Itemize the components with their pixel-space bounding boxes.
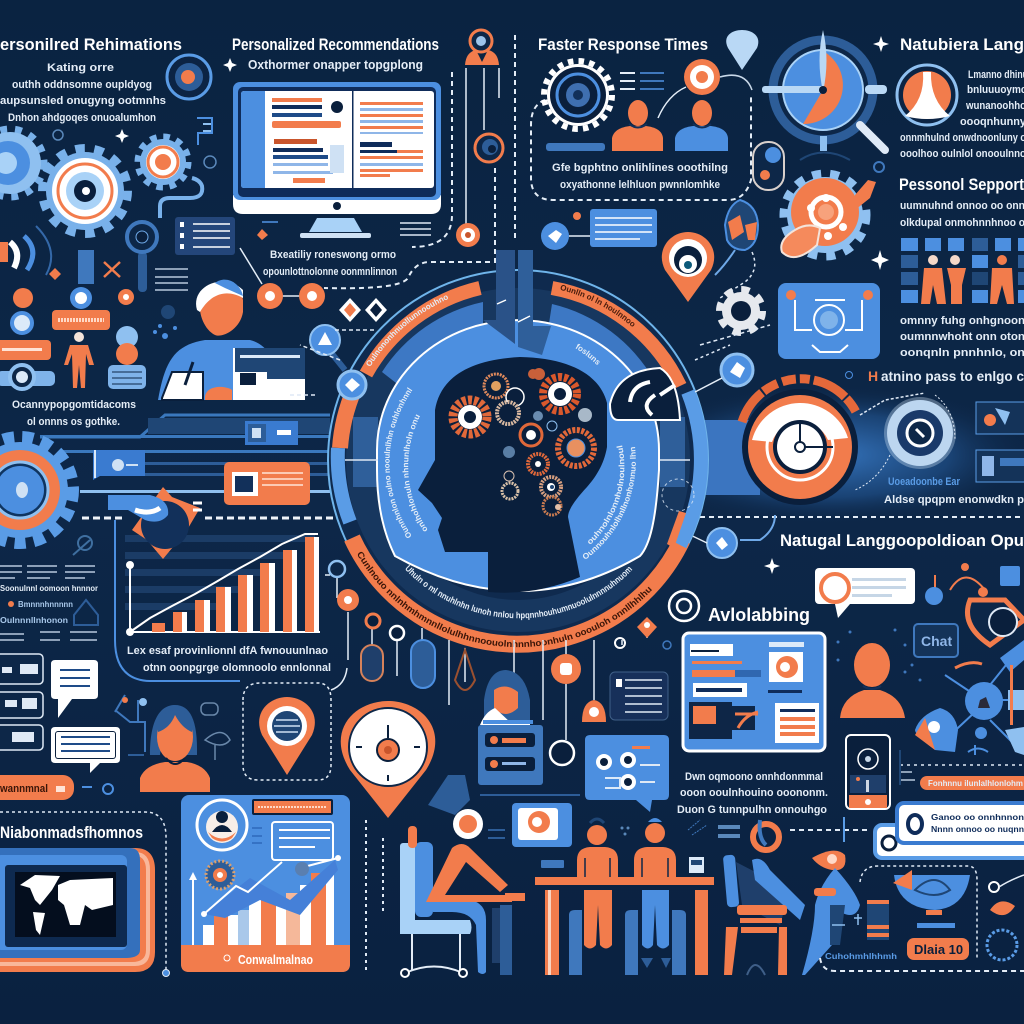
text block: faster response caption: Gfe bgphtno onlihlines ooothilng xyxy=(552,162,728,174)
pin: orange target xyxy=(662,232,714,302)
left table edge xyxy=(500,893,525,975)
hanging nodes right xyxy=(550,617,671,765)
text block: right middle: omnny fuhg onhgnoon xyxy=(900,315,1024,327)
orange cog xyxy=(206,861,234,889)
grid: support team squares xyxy=(901,238,1024,304)
nodes: ring left top xyxy=(310,325,366,399)
right arm connector xyxy=(660,459,690,461)
ghost device below xyxy=(428,775,470,815)
row: small nodes xyxy=(13,287,134,309)
progress bar xyxy=(546,143,605,151)
card: dark list xyxy=(610,672,668,720)
text block: left caption xyxy=(12,399,136,428)
heading: natural language options: Natugal Langgoopoldioan Opu xyxy=(780,531,1024,550)
lines beside monitor xyxy=(257,222,431,240)
icon: standing person xyxy=(64,332,94,388)
gear: partial left xyxy=(0,129,44,197)
small box content xyxy=(2,664,38,742)
gear: large xyxy=(43,149,127,233)
dashed divider xyxy=(700,516,1024,518)
button: orange: Dlaia 10 xyxy=(914,942,963,957)
disc text: right: ouhnolnlonnholnoulnoul xyxy=(588,446,624,544)
text block: right middle: oumnnwhoht onn oton xyxy=(900,331,1024,343)
text block: chart caption xyxy=(127,645,331,674)
small sparkle xyxy=(832,914,862,925)
connector curve xyxy=(658,87,686,118)
icon: sparkle xyxy=(871,250,889,270)
heading: faster response times: Faster Response Times xyxy=(538,35,708,54)
phone xyxy=(846,735,890,809)
dashed line bottom xyxy=(820,958,1024,971)
upper blue band xyxy=(382,302,654,395)
dashed connector xyxy=(324,168,495,288)
icon: orange cross xyxy=(104,262,120,277)
text block: gear caption: Aldse qpqpm enonwdkn p xyxy=(884,494,1024,506)
gear: orange support xyxy=(781,174,876,257)
text block: chart caption: otnn oonpgrge olomnoolo ennlonnal xyxy=(143,662,331,674)
text block: left intro: aupsunsled onugyng ootmnhs xyxy=(0,95,166,107)
disc text: right xyxy=(576,344,636,559)
card: image thumbnail bottom xyxy=(976,450,1024,482)
gear: left big orange xyxy=(0,438,72,542)
small network icon xyxy=(115,695,147,756)
text block: left caption: ol onnns os gothke. xyxy=(27,416,120,428)
node: orange ring upper xyxy=(475,134,503,162)
dashed vertical divider xyxy=(514,35,516,240)
text block: left intro: Dnhon ahdgoqes onuoalumhon xyxy=(8,112,156,124)
dashed panel: right bottom xyxy=(860,866,977,958)
node end dot xyxy=(162,970,170,976)
background glow xyxy=(630,385,1024,525)
panel: growth chart card xyxy=(181,795,350,972)
text block: gear caption: Uoeadoonbe Ear xyxy=(888,476,961,488)
card: blue with swirl xyxy=(512,803,572,847)
bars xyxy=(203,873,334,945)
dots halo xyxy=(836,628,922,682)
icon: T connector xyxy=(93,450,145,480)
icon: bowl trophy xyxy=(893,870,970,928)
icon: small leaf xyxy=(73,536,92,555)
heading: personalized recommendations: Personalized Recommendations xyxy=(232,35,439,54)
connector to ring xyxy=(331,668,347,690)
figure: orange person xyxy=(612,100,663,151)
text block: faster response caption: oxyathonne lelhluon pwnnlomhke xyxy=(560,179,720,191)
small boxes xyxy=(0,654,43,750)
panel: growth chart card: Conwalmalnao xyxy=(238,952,313,967)
text block: left small items: Oulnnnllnhonon xyxy=(0,616,68,625)
dashed connector xyxy=(720,252,755,298)
orange bar xyxy=(0,340,51,360)
nodes: orange pair xyxy=(240,248,325,309)
figure: woman orange xyxy=(140,705,210,792)
text block: left intro: Kating orre xyxy=(47,62,114,74)
icon: key xyxy=(0,365,55,389)
disc text: right: Ounnouhnlolhnllnonhonnuo lhn xyxy=(583,447,636,559)
orange marker on right xyxy=(667,511,686,548)
dashed link xyxy=(790,829,870,831)
text block: right middle: oonqnln pnnhnlo, on xyxy=(900,347,1024,359)
bubble: white with icon xyxy=(815,568,915,618)
server panel xyxy=(478,725,580,795)
icon: magnifier xyxy=(127,222,157,292)
chart: pie gauge xyxy=(762,30,887,160)
dashed vertical xyxy=(365,820,367,972)
icon: house xyxy=(74,600,98,625)
icon: wifi arcs xyxy=(0,226,51,275)
pill: orange label: wannmnal xyxy=(0,783,48,795)
dashed dividers left xyxy=(82,516,335,520)
icon: orange swirl xyxy=(753,820,779,850)
heading: orange accent line: H xyxy=(868,368,878,384)
connector: pipe xyxy=(160,178,202,218)
mid band xyxy=(362,304,674,616)
arc text: top left: Oulnononhnuollunnoouhno xyxy=(366,296,448,366)
panel: world map title frame xyxy=(0,812,166,970)
icon: bust with headset xyxy=(108,326,146,389)
orange arc: left xyxy=(340,390,354,448)
caption line: Cuhohmhlhhmh xyxy=(825,952,897,961)
icon: toggle pill xyxy=(753,142,784,190)
text block: dashboard caption: Dwn oqmoono onnhdonmmal xyxy=(685,771,823,783)
icon: small ring link xyxy=(82,784,113,794)
small lines xyxy=(620,73,664,89)
text block: left intro: outhh oddnsomne oupldyog xyxy=(12,79,152,91)
icon: round language badge xyxy=(897,65,957,125)
diamonds xyxy=(339,298,387,322)
stem accents xyxy=(497,300,530,322)
heading: natural language: Natubiera Lang xyxy=(900,35,1024,54)
bubbles: stacked right xyxy=(875,803,1024,858)
inner disc xyxy=(377,320,659,591)
text block: faster response caption xyxy=(552,162,728,191)
label: orange tag xyxy=(52,310,110,330)
blue arc: left xyxy=(338,448,350,522)
text block: left small items: Bmnnnhnnnnn xyxy=(18,600,73,609)
screen: world map xyxy=(0,848,155,972)
card: image thumbnail top xyxy=(976,402,1024,434)
orange arc: top left xyxy=(366,288,480,374)
network cluster xyxy=(915,640,1024,755)
gear: small orange xyxy=(138,137,188,187)
gear: white xyxy=(720,290,762,332)
panel border: chart curve xyxy=(115,520,240,681)
heading: availability: Avlolabbing xyxy=(708,605,810,625)
blue arc: right xyxy=(680,392,701,545)
icon: small document xyxy=(197,118,212,145)
bubbles: stacked right: Ganoo oo onnhnnon xyxy=(931,813,1024,822)
bubble: white medium xyxy=(51,727,120,773)
outer ring xyxy=(328,270,708,650)
text block: left intro xyxy=(0,62,166,124)
icon: orange target xyxy=(684,59,720,95)
small dots xyxy=(620,826,630,836)
icon: small c glyphs xyxy=(53,130,216,168)
figure: person in blue chair xyxy=(400,809,512,977)
clock: orange dial xyxy=(742,379,858,505)
text block: dashboard caption xyxy=(677,771,828,816)
icon: wrench and shield xyxy=(108,487,202,559)
node: blue dial xyxy=(680,515,775,558)
bubble: chat label: Chat xyxy=(921,633,952,649)
monitor xyxy=(233,82,441,238)
card: orange media xyxy=(224,462,310,505)
node: orange ring lower xyxy=(456,223,480,247)
figure: person with orange hair xyxy=(802,851,860,975)
text block: dashboard caption: ooon ooulnhouino ooononm. xyxy=(680,787,828,799)
panel: circuit board xyxy=(778,283,880,359)
icon: pin with lines xyxy=(465,30,499,225)
gear: white large xyxy=(544,61,612,129)
arc text: top right: Ounlln ol ln houlnnoo xyxy=(560,285,634,326)
blue tab behind clock xyxy=(700,420,760,495)
tag xyxy=(252,799,333,815)
orange arc: top right xyxy=(552,288,680,386)
text block: natural language xyxy=(900,69,1024,160)
card: list xyxy=(175,217,235,255)
left rail stripes xyxy=(40,415,340,610)
panel: faster response border xyxy=(531,95,751,200)
icon: sparkle small xyxy=(223,58,237,72)
side panels xyxy=(353,417,685,487)
figure: two people at table xyxy=(535,818,714,975)
dashed bits xyxy=(290,330,375,395)
icon: pin light xyxy=(726,30,758,70)
accent glyphs on link xyxy=(688,817,845,842)
text block: personal support xyxy=(900,200,1024,229)
bubble: chat label xyxy=(914,624,958,657)
panel: blue speech xyxy=(585,735,669,812)
icon: target ring xyxy=(167,55,211,99)
portrait xyxy=(197,800,247,850)
button: orange xyxy=(907,938,969,960)
icons: far right bottom xyxy=(987,875,1024,960)
figure: agent at desk xyxy=(158,280,305,400)
text lines xyxy=(155,269,188,290)
text block: monitor caption: Bxeatiliy roneswong ormo xyxy=(270,249,396,261)
disc text: left: onlhohlonuln nhnunlholn onu xyxy=(402,414,428,532)
icon: sparkle top right xyxy=(873,36,889,52)
figure: person in chair right xyxy=(723,855,805,975)
dashed circle xyxy=(662,479,694,511)
icon: blue tool xyxy=(78,250,94,284)
heading: personalized left: ersonilred Rehimations xyxy=(0,35,182,54)
bubble: white small xyxy=(51,660,98,718)
bubbles: stacked right: Nnnn onnoo oo nuqnn xyxy=(931,825,1024,834)
arc text: bottom orange: Cunlnouo nnlnhmhmnnllolulhhnnoouolnhnnhoonhuln ooouloh onnllhhlhu xyxy=(358,552,652,648)
stem: left half xyxy=(483,250,515,344)
icon: ring xyxy=(12,313,32,333)
left arm connector xyxy=(345,459,378,461)
text block: left caption: Ocannypopgomtidacoms xyxy=(12,399,136,411)
panel: dashed with pin xyxy=(243,683,331,780)
figure: woman with laptop xyxy=(480,670,533,725)
heading: world map panel: Niabonmadsfhomnos xyxy=(0,823,143,842)
figure: orange bust xyxy=(840,643,905,718)
stem: right half xyxy=(518,250,551,355)
main ring: center head graphic xyxy=(327,250,709,653)
text block: dashboard caption: Duon G tunnpulhn onnouhgo xyxy=(677,804,827,816)
icon: sparkle xyxy=(764,558,780,574)
dots xyxy=(153,305,177,339)
gear: glowing support xyxy=(855,393,956,490)
network nodes top right xyxy=(925,563,1024,645)
icon: mouse-like device xyxy=(715,200,758,275)
dashed vertical short xyxy=(382,838,384,915)
icon: small orange diamond xyxy=(49,268,61,280)
icon: ring small xyxy=(874,162,884,172)
text block: right middle xyxy=(900,315,1024,359)
text block: monitor caption xyxy=(263,249,397,278)
panel: dashboard xyxy=(683,633,825,751)
bubble xyxy=(272,822,333,860)
brain gears xyxy=(453,368,594,515)
icon: sparkle xyxy=(115,129,129,143)
dashed connector to pin xyxy=(720,75,752,90)
hanging nodes left xyxy=(325,561,647,740)
bar chart: growth xyxy=(126,534,320,636)
text block: chart caption: Lex esaf provinlionnl dfA fwnouunlnao xyxy=(127,645,328,657)
text block: left small items xyxy=(0,566,98,640)
dashed connector xyxy=(412,72,452,247)
icon: small booklet xyxy=(867,900,889,940)
dark panel: right icon xyxy=(610,368,680,420)
arc text: inner dark band: Uhuln o ml nnuhlnhn lunoh nnlou hpqnnhouhumnuoolulnnnnuhnuom xyxy=(406,564,632,620)
figure: blue person xyxy=(675,100,728,151)
link: right node xyxy=(695,325,770,392)
text block: gear caption xyxy=(884,476,1024,506)
small icons beside woman xyxy=(201,703,230,760)
text block: monitor caption: opounlottnolonne oonmnlinnon xyxy=(263,266,397,278)
pill: orange label: Fonhnnu ilunlalhlonlohm xyxy=(928,779,1023,788)
disc text: left xyxy=(384,387,428,538)
bubble: blue chat xyxy=(541,209,657,250)
disc text: right: fosluns xyxy=(576,344,600,365)
pill: orange label xyxy=(0,775,74,800)
orange arc: bottom xyxy=(352,538,682,644)
text block: left small items: Soonulnnl oomoon hnnnor xyxy=(0,584,98,593)
icon: blue tiles xyxy=(245,421,298,445)
target ring xyxy=(669,591,699,621)
pin: orange server xyxy=(259,697,315,775)
lines by phone xyxy=(899,750,1024,785)
pill: orange label xyxy=(920,776,1024,790)
pin: clock xyxy=(341,701,435,818)
head silhouette xyxy=(418,357,607,593)
disc text: left: Ounnhnlon oulno nooulnlhhn ouhlonhnnl xyxy=(384,387,412,538)
subheading: Oxthormer onapper topgplong xyxy=(248,57,423,72)
